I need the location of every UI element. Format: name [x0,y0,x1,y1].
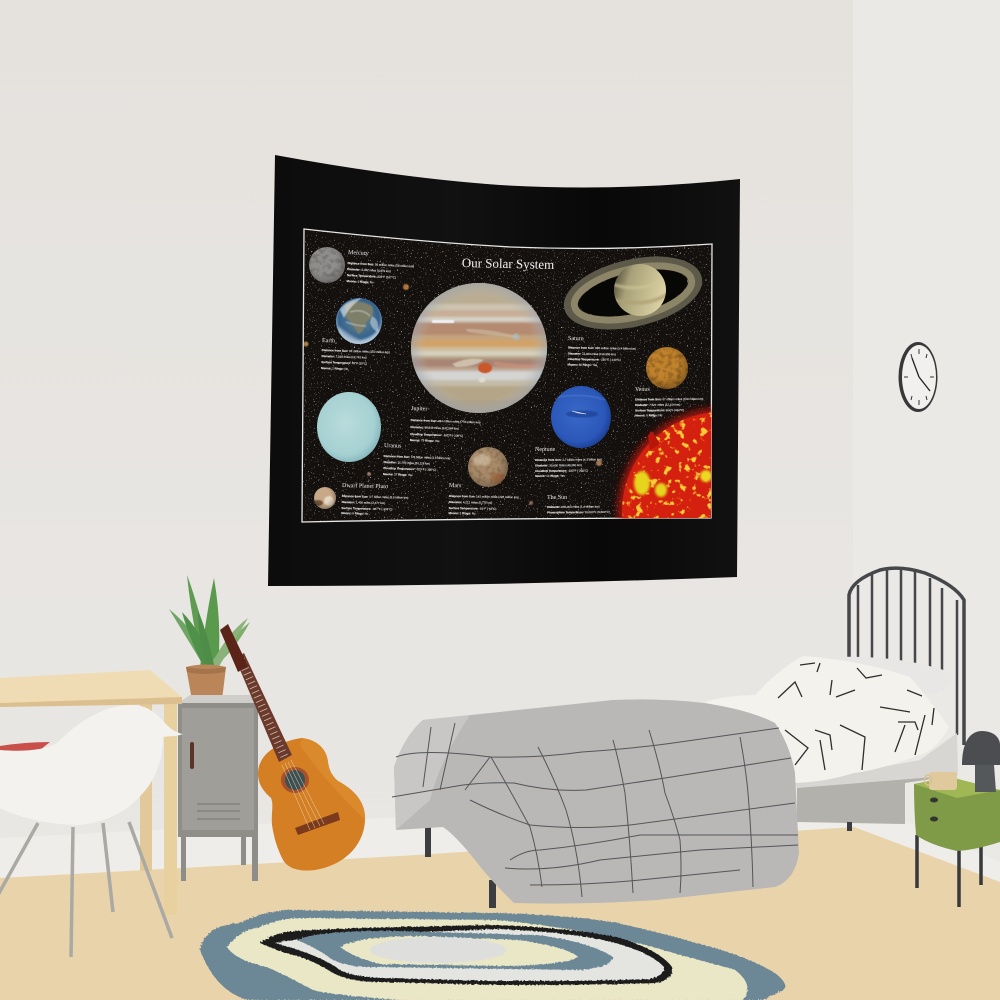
text block: Jupiter: Distance from Sun: 484 million miles (778 million km) [411,418,481,424]
patterned duvet [704,656,949,783]
text block: Venus: Diameter: 7,521 miles (12,104 km) [635,403,680,407]
lamp [962,731,1000,792]
text block: Jupiter: Cloudtop Temperature: -162°F (-108°C) [410,432,463,438]
white chair [0,705,183,957]
round patterned rug [200,910,785,1000]
mug [924,772,957,790]
text block: Neptune: Moons: 14 Rings: Yes [535,474,565,478]
text block: Neptune: Distance from Sun: 2.7 billion miles (4.3 billion km) [535,457,602,462]
bed [392,568,964,908]
text block: Uranus: Diameter: 31,763 miles (51,118 km) [383,460,430,466]
room: back wall [0,0,854,880]
text block: Uranus [383,443,451,478]
planet: Neptune [551,386,611,448]
text block: Dwarf Planet Pluto: Distance from Sun: 3.7 billion miles (5.9 billion km) [342,494,409,500]
back pillow [831,657,953,695]
text block: Jupiter: Moons: 79 Rings: Yes [410,438,440,443]
grey checked blanket [392,699,799,904]
text block: Earth: Surface Temperature: 59°F (15°C) [321,360,367,366]
text block: Earth: Diameter: 7,918 miles (12,742 km) [321,354,367,360]
starfield background [300,225,715,525]
text block: Neptune: Cloudtop Temperature: -330°F (-200°C) [535,469,588,473]
text block: Mars: Moons: 2 Rings: No [449,511,476,515]
text block: Venus: Surface Temperature: 864°F (462°C) [635,408,684,412]
planet: Uranus [317,392,381,462]
the Sun [612,402,712,518]
text block: Mercury: Distance from Sun: 36 million miles (58 million km) [347,261,414,268]
text block: Jupiter: Jupiter [411,406,427,413]
text block: Saturn [568,336,636,368]
planet: Dwarf Planet Pluto [313,487,336,509]
text block: Earth: Earth [322,338,335,344]
poster artwork [301,228,713,523]
aloe plant in pot [169,575,250,702]
text block: Venus: Distance from Sun: 67 million miles (108 million km) [635,397,703,401]
text block: Earth: Moons: 1 Rings: No [321,366,349,371]
text block: Mercury: Surface Temperature: 333°F (167°C) [347,273,396,280]
planet: Saturn with rings [564,256,702,330]
text block: Earth [321,338,390,372]
guitar [220,624,365,871]
text block: Mercury [346,250,415,286]
bed headboard [849,568,964,745]
text block: The Sun: Photosphere Temperature: 10,000°F (5,500°C) [547,510,610,514]
planet: Mercury [309,247,345,283]
text block: Mars: Mars [449,483,462,489]
text block: The Sun [547,494,610,514]
text block: Saturn: Saturn [568,336,584,342]
text block: Saturn: Cloudtop Temperature: -220°F (-140°C) [568,357,621,362]
text block: Saturn: Diameter: 72,400 miles (116,500 km) [568,351,616,356]
green nightstand with mug and lamp [914,731,1000,907]
room: skirting board [0,800,1000,890]
text block: Uranus: Distance from Sun: 1.8 billion miles (2.9 billion km) [384,454,450,460]
text block: Mars: Diameter: 4,212 miles (6,779 km) [449,500,492,505]
planet: Venus [645,346,689,390]
text block: Neptune: Diameter: 30,600 miles (49,250 km) [535,463,582,467]
text block: Jupiter [410,406,481,444]
planet: Earth [336,298,382,346]
tapestry [268,155,740,586]
text block: Mercury: Mercury [348,250,369,257]
wall clock [898,342,938,412]
title: Our Solar System [462,255,554,272]
poster white border [302,229,712,522]
text block: Uranus: Moons: 27 Rings: Yes [383,472,413,477]
text block: Saturn: Distance from Sun: 886 million miles (1.4 billion km) [568,345,636,351]
text block: Dwarf Planet Pluto: Dwarf Planet Pluto [342,482,388,490]
text block: Venus: Moons: 0 Rings: No [635,413,663,417]
text block: Neptune [535,446,602,478]
text block: Dwarf Planet Pluto [341,482,409,517]
planet: Mars [468,447,508,487]
text block: Jupiter: Diameter: 88,846 miles (142,984 km) [410,425,459,431]
text block: Uranus: Uranus [384,443,402,450]
planet: Jupiter [411,283,547,413]
text block: Venus: Venus [635,387,650,393]
text block: Neptune: Neptune [535,447,556,453]
text block: Mars: Surface Temperature: -81°F (-63°C) [449,506,496,511]
desk [0,670,182,915]
bed base [795,733,958,788]
text block: Dwarf Planet Pluto: Moons: 5 Rings: No [341,511,369,516]
text block: Earth: Distance from Sun: 93 million miles (150 million km) [322,348,390,354]
room: right wall [853,0,1000,890]
text block: The Sun: The Sun [547,495,567,501]
locker cabinet [178,695,258,881]
text block: Mercury: Moons: 0 Rings: No [346,279,374,284]
room: wooden floor [0,827,1000,1000]
text block: The Sun: Diameter: 865,000 miles (1.4 million km) [547,505,600,509]
text block: Saturn: Moons: 82 Rings: Yes [568,362,598,367]
text block: Mars [449,483,519,516]
text block: Mercury: Diameter: 3,032 miles (4,879 km) [347,267,391,273]
text block: Mars: Distance from Sun: 142 million miles (228 million km) [449,494,519,499]
text block: Venus [635,386,704,417]
text block: Uranus: Cloudtop Temperature: -320°F (-195°C) [383,466,436,472]
text block: Dwarf Planet Pluto: Diameter: 1,400 miles (2,377 km) [342,500,385,505]
text block: Dwarf Planet Pluto: Surface Temperature: -387°F (-233°C) [341,506,392,511]
